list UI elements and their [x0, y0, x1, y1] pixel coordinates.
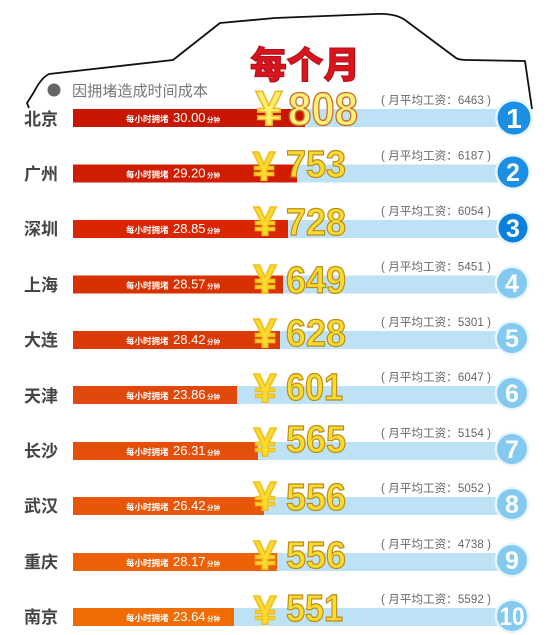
row 6: Tianjin: 天津 — [24, 387, 58, 406]
row 5: Dalian: 每小时拥堵 — [126, 336, 169, 346]
row 5: Dalian: 分钟 — [207, 337, 220, 346]
row 6: Tianjin: ( 月平均工资：6047 ) — [381, 371, 491, 384]
row 7: Changsha: ¥ — [254, 419, 277, 465]
row 2: Guangzhou: 2 — [506, 159, 520, 187]
row 7: Changsha: 长沙 — [24, 442, 58, 461]
car outline — [27, 14, 532, 109]
row 9: Chongqing: 9 — [505, 547, 519, 575]
row 3: Shenzhen: 分钟 — [207, 226, 220, 235]
row 10: Nanjing: 551 — [286, 588, 343, 630]
row 10: Nanjing — [24, 587, 530, 634]
row 4: Shanghai: 每小时拥堵 — [126, 280, 169, 290]
row 2: Guangzhou: 分钟 — [207, 170, 220, 180]
row 5: Dalian — [24, 310, 530, 356]
row 4: Shanghai: 4 — [505, 270, 519, 298]
row 7: Changsha: ( 月平均工资：5154 ) — [381, 427, 491, 440]
row 7: Changsha: 分钟 — [207, 448, 220, 457]
row 5: Dalian: ¥ — [254, 310, 277, 356]
row 2: Guangzhou: 每小时拥堵 — [126, 170, 169, 180]
row 6: Tianjin: 分钟 — [207, 392, 220, 401]
row 7: Changsha: 每小时拥堵 — [126, 447, 169, 457]
row 5: Dalian: ( 月平均工资：5301 ) — [381, 316, 491, 329]
row 10: Nanjing: 南京 — [24, 607, 58, 627]
row 3: Shenzhen: 728 — [286, 202, 346, 244]
row 2: Guangzhou — [24, 143, 531, 190]
row 9: Chongqing: 556 — [286, 535, 346, 577]
row 8: Wuhan: 26.42 — [173, 498, 206, 513]
row 3: Shenzhen — [24, 198, 530, 245]
row 7: Changsha — [24, 419, 530, 466]
row 2: Guangzhou: 29.20 — [173, 166, 206, 180]
row 4: Shanghai: 上海 — [24, 276, 58, 295]
row 9: Chongqing: 28.17 — [173, 554, 206, 569]
row 1: Beijing: 北京 — [24, 109, 58, 129]
row 1: Beijing: 每小时拥堵 — [126, 114, 169, 124]
row 9: Chongqing: ( 月平均工资：4738 ) — [381, 538, 491, 551]
row 1: Beijing: ( 月平均工资：6463 ) — [381, 94, 491, 107]
row 4: Shanghai: 649 — [286, 260, 346, 302]
row 4: Shanghai — [24, 256, 530, 302]
row 8: Wuhan: 8 — [505, 491, 519, 519]
row 9: Chongqing: 分钟 — [207, 559, 220, 568]
row 6: Tianjin: 每小时拥堵 — [126, 391, 169, 401]
row 2: Guangzhou: ( 月平均工资：6187 ) — [381, 150, 491, 162]
row 7: Changsha: 7 — [505, 436, 519, 464]
row 5: Dalian: 大连 — [24, 331, 58, 350]
row 10: Nanjing: 23.64 — [173, 609, 206, 624]
row 5: Dalian: 5 — [505, 325, 519, 353]
row 3: Shenzhen: 28.85 — [173, 221, 206, 236]
row 6: Tianjin — [24, 365, 530, 411]
row 1: Beijing: ¥ — [256, 82, 283, 136]
row 9: Chongqing — [24, 532, 530, 578]
row 3: Shenzhen: 深圳 — [24, 220, 58, 239]
row 8: Wuhan: 分钟 — [207, 503, 220, 512]
row 2: Guangzhou: 广州 — [24, 165, 58, 184]
row 8: Wuhan — [24, 473, 530, 522]
legend: 因拥堵造成时间成本 — [72, 83, 208, 100]
row 4: Shanghai: 28.57 — [173, 276, 206, 292]
row 4: Shanghai: ¥ — [254, 256, 277, 302]
row 7: Changsha: 565 — [286, 419, 346, 461]
row 9: Chongqing: 每小时拥堵 — [126, 558, 169, 568]
row 7: Changsha: 26.31 — [173, 443, 206, 458]
row 4: Shanghai: 分钟 — [207, 282, 220, 290]
row 5: Dalian: 628 — [286, 313, 346, 355]
row 1: Beijing: 30.00 — [173, 110, 206, 125]
row 10: Nanjing: 10 — [500, 603, 524, 631]
row 8: Wuhan: 556 — [286, 477, 346, 519]
row 8: Wuhan: 武汉 — [24, 497, 58, 516]
row 6: Tianjin: ¥ — [254, 365, 277, 411]
row 2: Guangzhou: ¥ — [253, 143, 276, 189]
row 8: Wuhan: ¥ — [254, 473, 277, 519]
row 9: Chongqing: ¥ — [254, 532, 277, 578]
row 4: Shanghai: ( 月平均工资：5451 ) — [381, 260, 491, 274]
row 10: Nanjing: 每小时拥堵 — [126, 613, 169, 623]
row 2: Guangzhou: 753 — [286, 144, 346, 186]
row 9: Chongqing: 重庆 — [24, 552, 58, 572]
row 3: Shenzhen: 每小时拥堵 — [126, 225, 169, 235]
row 3: Shenzhen: 3 — [506, 215, 520, 243]
row 1: Beijing: 分钟 — [207, 115, 220, 124]
row 10: Nanjing: ( 月平均工资：5592 ) — [381, 593, 491, 606]
row 8: Wuhan: 每小时拥堵 — [126, 502, 169, 512]
row 1: Beijing — [24, 82, 533, 137]
row 8: Wuhan: ( 月平均工资：5052 ) — [381, 482, 491, 495]
row 6: Tianjin: 6 — [505, 380, 519, 408]
heading: per month: 每个月 — [250, 45, 360, 86]
row 10: Nanjing: ¥ — [254, 587, 277, 633]
row 10: Nanjing: 分钟 — [207, 614, 220, 623]
row 1: Beijing: 1 — [506, 103, 522, 134]
row 1: Beijing: 808 — [288, 83, 358, 135]
row 6: Tianjin: 601 — [286, 367, 343, 409]
row 3: Shenzhen: ¥ — [254, 198, 277, 244]
row 6: Tianjin: 23.86 — [173, 387, 206, 402]
row 5: Dalian: 28.42 — [173, 332, 206, 347]
row 3: Shenzhen: ( 月平均工资：6054 ) — [381, 205, 491, 218]
